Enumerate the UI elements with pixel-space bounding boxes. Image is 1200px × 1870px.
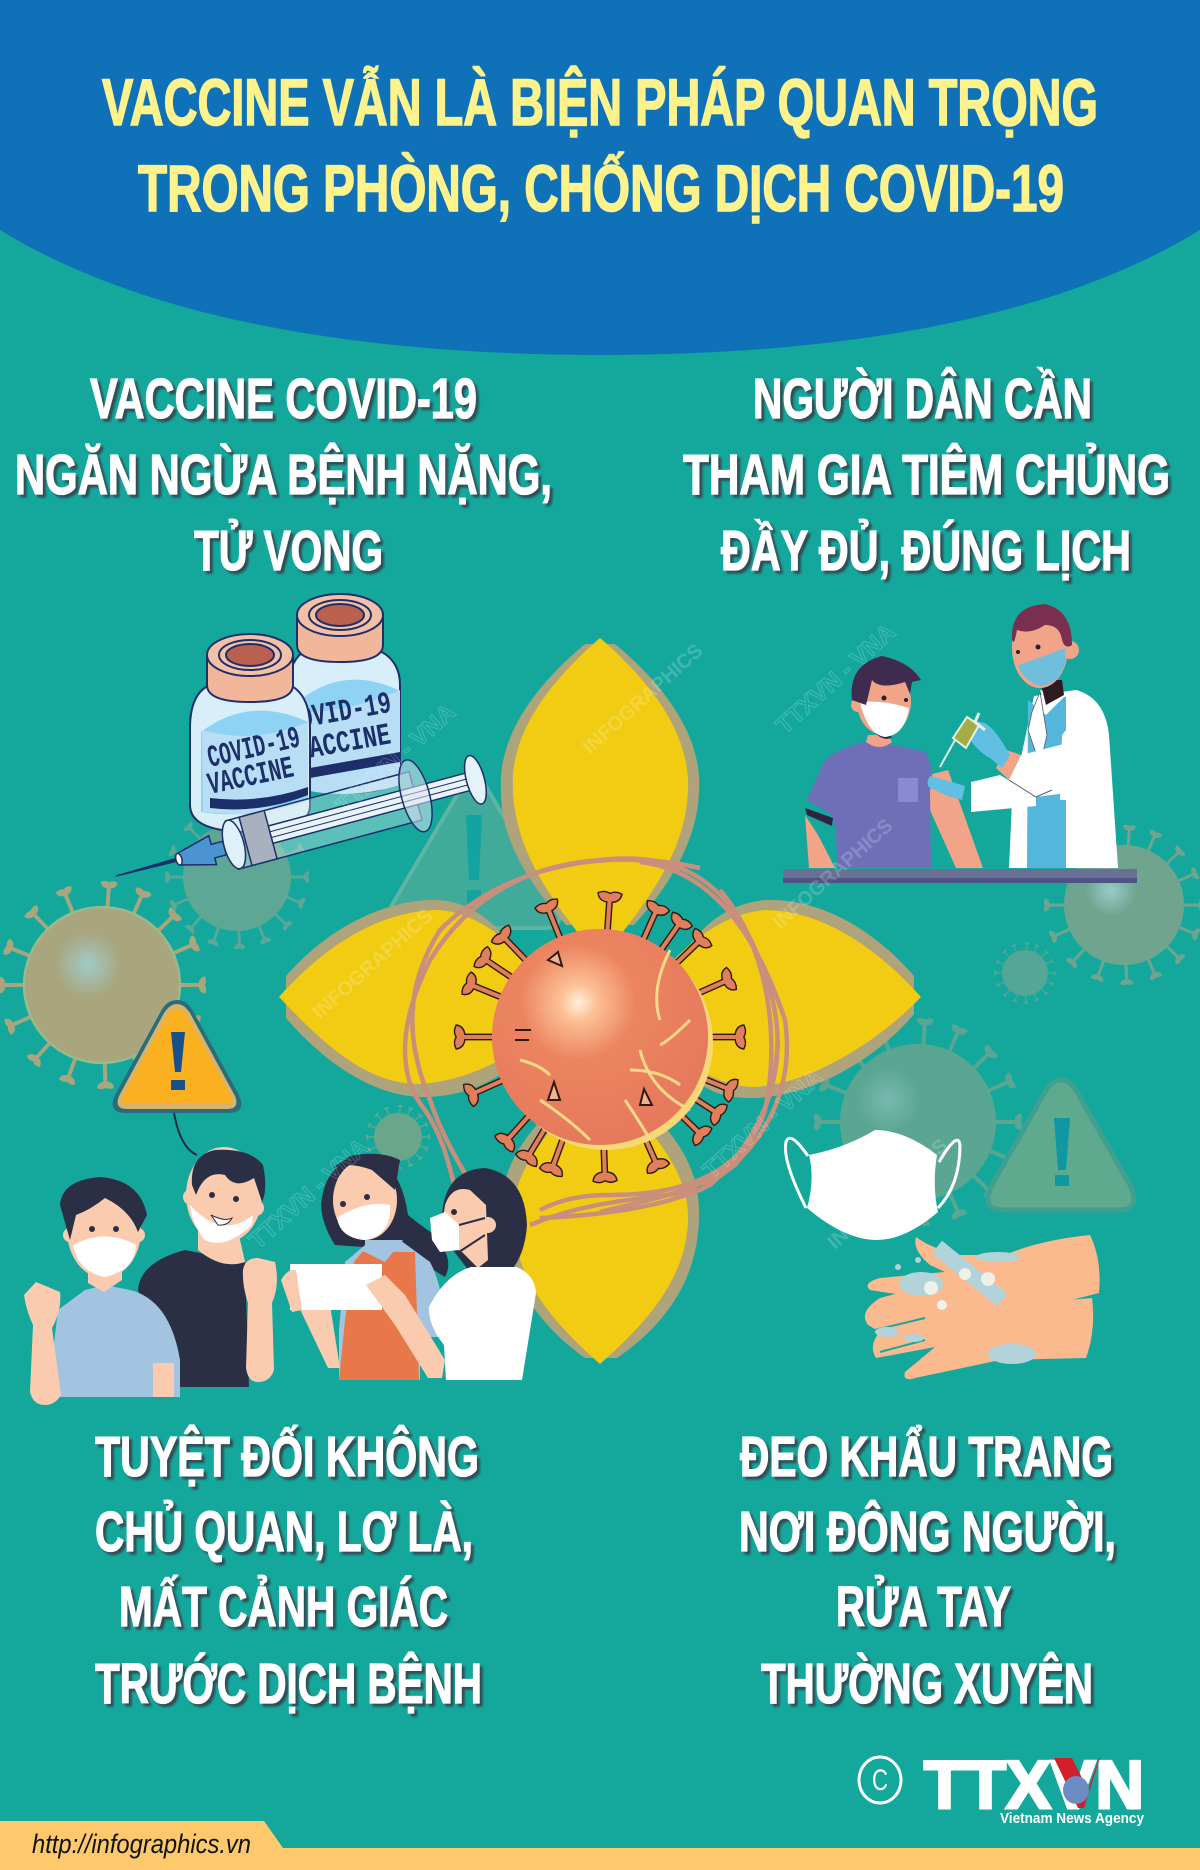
section text: do not be complacent: TRƯỚC DỊCH BỆNH: [95, 1651, 482, 1716]
background virus: large mid right: [814, 1018, 1022, 1226]
watermarks: TTXVN - VNA: [331, 699, 461, 819]
front vial label: VACCINE: [205, 751, 297, 804]
section text: get fully vaccinated: [683, 366, 1170, 583]
man with black shirt: [138, 1147, 277, 1387]
section text: wear masks and wash hands: [739, 1424, 1116, 1716]
section text: vaccine prevents severe disease: VACCINE COVID-19: [90, 367, 477, 431]
section text: do not be complacent: [95, 1424, 482, 1716]
background virus: right: [1044, 825, 1200, 985]
bottom petal: [501, 1080, 699, 1364]
watermarks: INFOGRAPHICS: [824, 1135, 952, 1254]
syringe held by the doctor: [940, 740, 955, 767]
right petal: [630, 900, 921, 1098]
section text: vaccine prevents severe disease: TỬ VONG: [194, 518, 383, 583]
watermarks: TTXVN - VNA: [698, 1064, 828, 1184]
flower petals: [279, 638, 921, 1364]
back vial label: [284, 687, 400, 770]
background virus: small lower left: [366, 1105, 430, 1169]
central coronavirus: [454, 891, 746, 1183]
watermarks: INFOGRAPHICS: [309, 905, 437, 1024]
faint warning triangle left: [389, 778, 559, 928]
back vial: [289, 594, 400, 794]
doctor's sleeves: [1009, 730, 1100, 797]
faint warning triangle right: [988, 1080, 1134, 1210]
section text: vaccine prevents severe disease: NGĂN NGỪA BỆNH NẶNG,: [15, 442, 552, 507]
background virus: faint left: [165, 805, 309, 949]
group of people: [24, 1147, 536, 1405]
virus surface marks: [515, 952, 652, 1105]
watermarks: INFOGRAPHICS: [769, 815, 897, 934]
blue header arc: [0, 0, 1200, 355]
face mask: [785, 1130, 960, 1240]
section text: vaccine prevents severe disease: [15, 367, 552, 583]
section text: wear masks and wash hands: RỬA TAY: [836, 1574, 1011, 1639]
top petal: [501, 638, 699, 960]
man with blue shirt: [24, 1177, 180, 1405]
doctor head: [1040, 680, 1064, 705]
patient: [805, 656, 983, 868]
back vial label: COVID-19: [284, 687, 394, 740]
soap bubbles: [875, 1247, 1036, 1364]
watermarks: [244, 619, 952, 1254]
background virus: small right: [994, 942, 1056, 1004]
front vial label: COVID-19: [204, 721, 304, 777]
woman with apron: [281, 1154, 448, 1380]
front vial label: [204, 721, 304, 804]
section text: do not be complacent: CHỦ QUAN, LƠ LÀ,: [95, 1499, 473, 1564]
doctor: [940, 604, 1118, 868]
watermarks: TTXVN - VNA: [244, 1134, 374, 1254]
doctor's forearm and glove: [996, 750, 1021, 780]
back vial label: VACCINE: [293, 719, 394, 770]
TTXVN logo: C: [872, 1764, 888, 1797]
washing hands: [865, 1235, 1100, 1379]
doctor's glove on arm: [928, 776, 965, 800]
title: [102, 65, 1098, 225]
TTXVN logo: TTXVN: [924, 1747, 1144, 1823]
vaccine vials and syringe: [107, 594, 494, 912]
watermarks: TTXVN - VNA: [771, 619, 901, 739]
TTXVN logo: Vietnam News Agency: [1000, 1811, 1144, 1827]
front vial: [190, 634, 310, 832]
left petal: [279, 900, 570, 1097]
footer band with URL: http://infographics.vn: [32, 1829, 251, 1859]
woman in white: [429, 1168, 536, 1380]
footer band with URL: [0, 1821, 1200, 1870]
vaccination scene: [783, 604, 1137, 883]
table: [783, 869, 1137, 883]
syringe: [107, 742, 494, 912]
section text: do not be complacent: TUYỆT ĐỐI KHÔNG: [95, 1424, 479, 1489]
tangled rings: [405, 859, 787, 1225]
background virus: left large: [0, 881, 206, 1089]
warning sign: [113, 1000, 241, 1155]
watermarks: INFOGRAPHICS: [579, 640, 707, 759]
section text: do not be complacent: MẤT CẢNH GIÁC: [119, 1574, 448, 1639]
